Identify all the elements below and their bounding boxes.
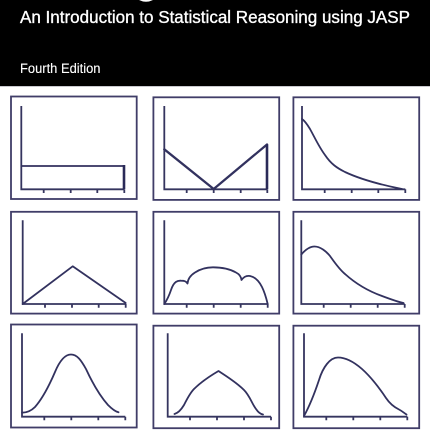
panel: multi-humped distribution (153, 212, 279, 314)
cropped title descender (139, 0, 153, 2)
panel: uniform distribution (11, 96, 137, 199)
panel: normal distribution (11, 324, 137, 428)
edition: Fourth Edition (20, 61, 100, 76)
panel: skewed bell distribution (293, 326, 419, 428)
panel: V-shaped distribution (153, 97, 279, 200)
panel: exponential decay distribution (293, 97, 419, 200)
panel: right-skewed humped distribution (293, 212, 419, 314)
subtitle: An Introduction to Statistical Reasoning using JASP (20, 7, 410, 27)
header band (0, 0, 430, 87)
panel: peaked bell distribution (153, 326, 279, 428)
panel: triangular distribution (11, 212, 137, 314)
